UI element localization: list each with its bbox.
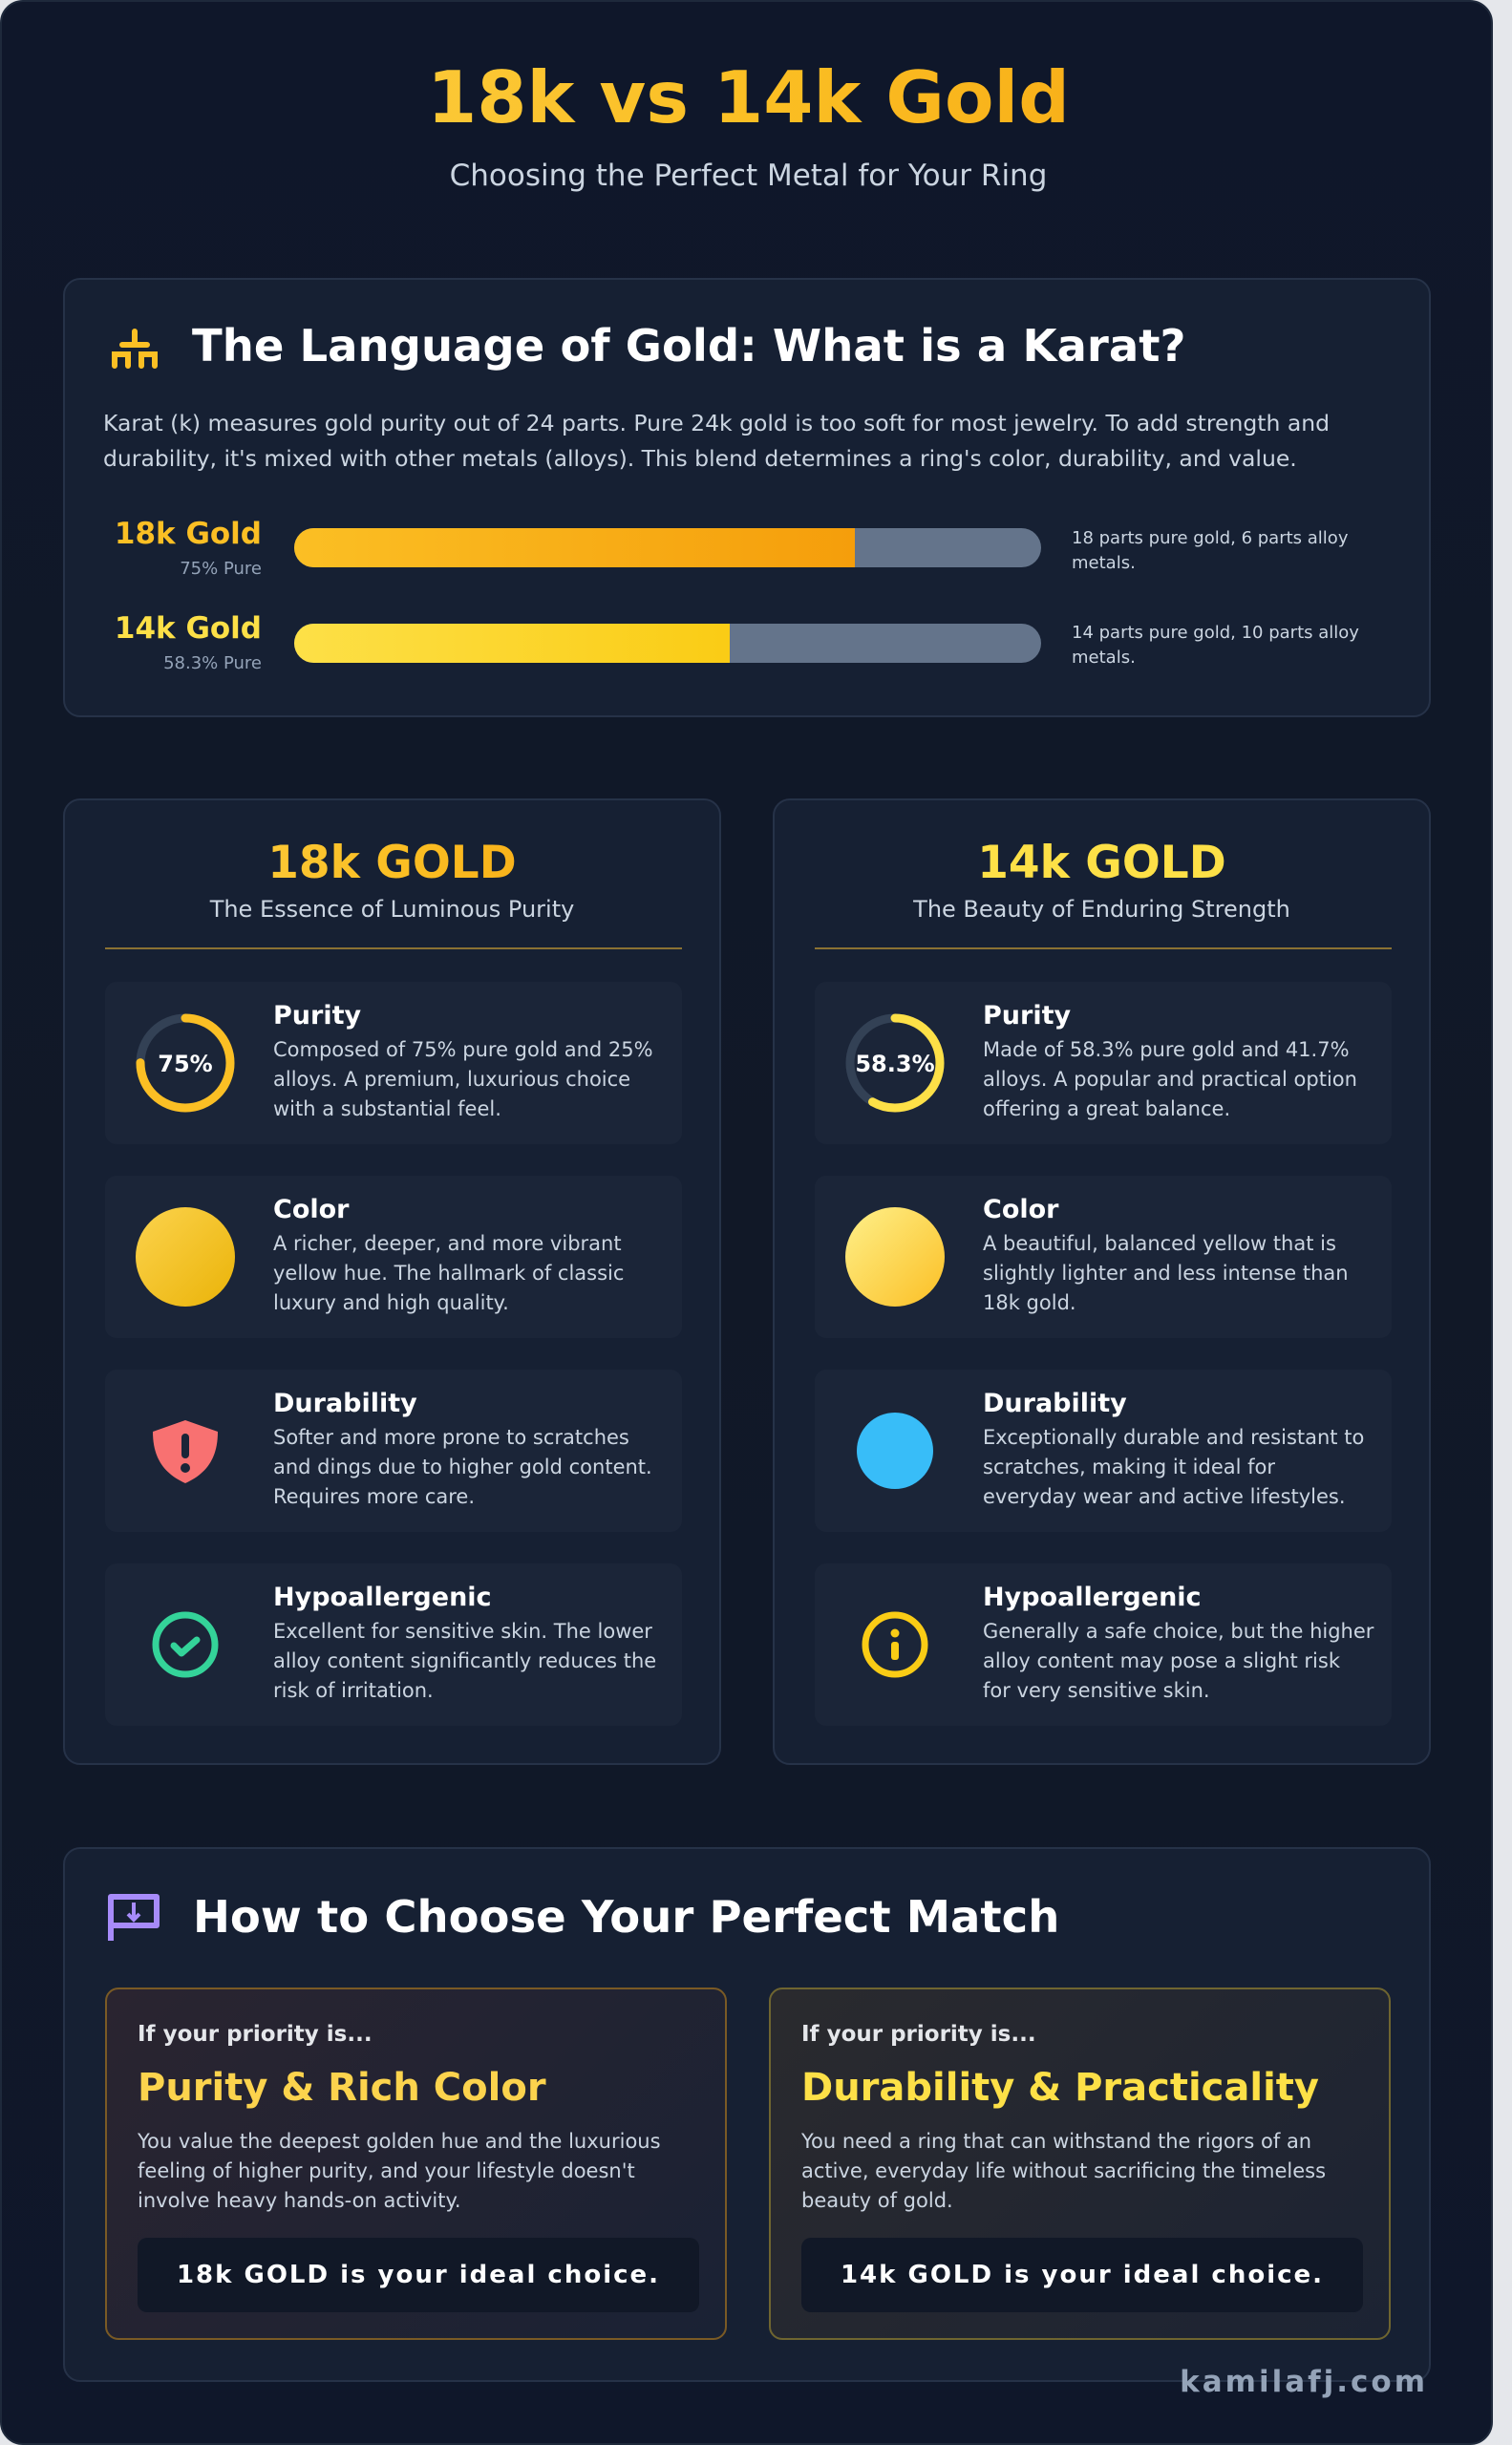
icon: gold circle (136, 1207, 235, 1307)
item: color (105, 1176, 682, 1338)
choice: 18k: You value the deepest golden hue and the luxurious feeling of higher purity, and your lifestyle doesn't involve heavy hands-on activity. (138, 2130, 661, 2212)
item: durability: Exceptionally durable and resistant to scratches, making it ideal for everyday wear and active lifestyles. (983, 1426, 1364, 1508)
icon: 75% ring (136, 1014, 235, 1112)
choice: 14k (769, 1988, 1391, 2340)
choice: 14k: Durability & Practicality (801, 2066, 1319, 2110)
item: color: A beautiful, balanced yellow that is slightly lighter and less intense than 18k gold. (983, 1232, 1349, 1314)
footer: watermark: kamilafj.com (1180, 2365, 1428, 2399)
card title: 14k GOLD (977, 837, 1226, 889)
intro text: Karat (k) measures gold purity out of 24 parts. Pure 24k gold is too soft for most jewelry. To add strength and durability, it's mixed with other metals (alloys). This blend determines a ring's color, durability, and value. (103, 410, 1330, 472)
title: 18k vs 14k Gold (427, 55, 1070, 139)
choice: 14k: You need a ring that can withstand the rigors of an active, everyday life without sacrificing the timeless beauty of gold. (801, 2130, 1326, 2212)
panel: 14k gold: The Beauty of Enduring Strength (913, 896, 1290, 923)
icon: 58.3% ring: 58.3% (855, 1051, 935, 1077)
bar: 18k (115, 517, 1348, 579)
item: purity: Purity (273, 1001, 361, 1031)
card title: 18k GOLD (267, 837, 517, 889)
item: purity (815, 982, 1392, 1144)
item: hypoallergenic: Hypoallergenic (983, 1583, 1202, 1612)
panel: how to choose (63, 1847, 1431, 2382)
heading: The Language of Gold: What is a Karat? (192, 320, 1185, 372)
item: hypoallergenic (815, 1563, 1392, 1726)
item: hypoallergenic (105, 1563, 682, 1726)
item: hypoallergenic: Excellent for sensitive skin. The lower alloy content significantly reduces the risk of irritation. (273, 1620, 656, 1702)
item: hypoallergenic: for very sensitive skin. (983, 1679, 1210, 1702)
choice: 14k: 14k GOLD is your ideal choice. (841, 2261, 1324, 2289)
item: hypoallergenic: alloy content may pose a slight risk (983, 1649, 1340, 1672)
icon: scale (112, 329, 158, 369)
bar: 18k: 75% Pure (180, 559, 262, 579)
choice: 14k: If your priority is... (801, 2022, 1036, 2047)
icon: check circle (153, 1612, 218, 1677)
item: purity: Made of 58.3% pure gold and 41.7% alloys. A popular and practical option offering a great balance. (983, 1038, 1357, 1120)
item: durability: Durability (983, 1389, 1127, 1418)
title (2, 55, 1495, 139)
item: durability (105, 1370, 682, 1532)
item: purity: Purity (983, 1001, 1071, 1031)
icon: 58.3% ring (846, 1014, 944, 1112)
item: hypoallergenic: Generally a safe choice, but the higher (983, 1620, 1374, 1643)
subtitle: Choosing the Perfect Metal for Your Ring (450, 159, 1047, 193)
bar: 14k: 14k Gold (115, 611, 262, 646)
item: purity: Composed of 75% pure gold and 25% alloys. A premium, luxurious choice with a substantial feel. (273, 1038, 653, 1120)
item: durability (815, 1370, 1392, 1532)
item: durability: Durability (273, 1389, 417, 1418)
heading: How to Choose Your Perfect Match (193, 1891, 1059, 1943)
card title (65, 837, 719, 889)
bar: 14k: 14 parts pure gold, 10 parts alloy metals. (1072, 623, 1359, 668)
choice: 18k: If your priority is... (138, 2022, 373, 2047)
item: hypoallergenic: Hypoallergenic (273, 1583, 492, 1612)
item: color: A richer, deeper, and more vibrant yellow hue. The hallmark of classic luxury and high quality. (273, 1232, 624, 1314)
panel: 18k gold: The Essence of Luminous Purity (210, 896, 574, 923)
icon: blue circle (857, 1413, 933, 1489)
item: durability: Softer and more prone to scratches and dings due to higher gold content. Requires more care. (273, 1426, 652, 1508)
panel: 14k gold (773, 798, 1431, 1765)
item: purity (105, 982, 682, 1144)
choice: 18k: 18k GOLD is your ideal choice. (177, 2261, 660, 2289)
choice: 18k: Purity & Rich Color (138, 2066, 546, 2110)
icon: light gold circle (845, 1207, 945, 1307)
item: color: Color (983, 1195, 1058, 1224)
icon: info circle (862, 1612, 928, 1677)
bar: 18k: 18 parts pure gold, 6 parts alloy metals. (1072, 528, 1348, 573)
item: color (815, 1176, 1392, 1338)
bar: 18k: 18k Gold (115, 517, 262, 551)
bar: 14k: 58.3% Pure (163, 653, 262, 673)
panel: karat explanation (63, 278, 1431, 717)
choice: 18k (105, 1988, 727, 2340)
bar: 14k (115, 611, 1359, 673)
icon: warning shield (153, 1420, 218, 1483)
icon: 75% ring: 75% (158, 1051, 213, 1077)
item: color: Color (273, 1195, 349, 1224)
panel: 18k gold (63, 798, 721, 1765)
icon: flag (108, 1894, 160, 1941)
